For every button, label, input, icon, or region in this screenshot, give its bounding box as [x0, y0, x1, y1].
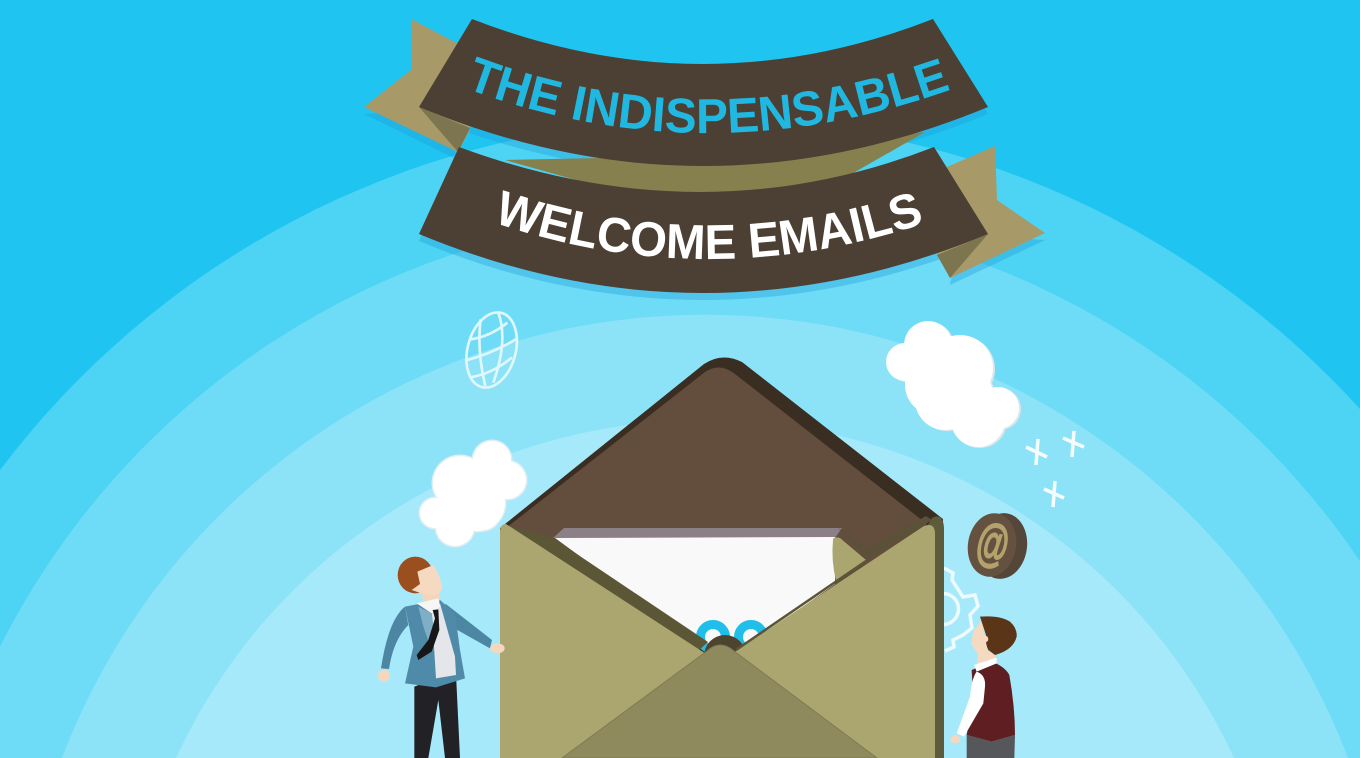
sleeve	[957, 672, 985, 737]
icon: at sign coin	[963, 509, 1031, 582]
icon: globe	[459, 307, 525, 393]
envelope back edge	[500, 357, 944, 758]
ribbon shadows	[364, 26, 1045, 300]
trousers	[414, 674, 460, 758]
envelope	[500, 357, 944, 758]
envelope side strip	[925, 516, 944, 758]
letter curl	[832, 537, 866, 581]
lapel	[418, 607, 434, 641]
ear	[982, 636, 988, 642]
hair	[980, 616, 1017, 655]
right arm	[445, 603, 492, 648]
ribbon connecting band	[505, 132, 925, 215]
ribbon left tail	[364, 19, 470, 152]
heading line one: THE INDISPENSABLE	[474, 56, 950, 134]
left arm	[381, 607, 408, 669]
icon: at sign coin: @	[972, 512, 1013, 575]
envelope bottom flap	[562, 645, 877, 758]
icon: left cloud	[418, 440, 528, 548]
envelope right fold line	[736, 561, 866, 650]
neck	[977, 652, 996, 665]
letter sheet	[555, 537, 835, 648]
face	[971, 620, 988, 655]
envelope seal arc	[704, 635, 746, 677]
jacket	[405, 600, 465, 687]
title ribbon	[364, 19, 1045, 300]
ribbon right tail	[935, 146, 1045, 278]
neck	[422, 590, 440, 605]
figure: man in maroon vest	[950, 616, 1017, 758]
hair	[398, 557, 433, 593]
banner: the indispensable	[419, 19, 988, 166]
envelope dark fold strip	[505, 525, 708, 652]
icon: sparkle crosses	[1026, 431, 1084, 507]
envelope left panel	[500, 524, 716, 758]
figure: man in blue suit	[378, 557, 505, 758]
banner: welcome emails	[419, 147, 988, 293]
vest	[967, 662, 1015, 742]
icon: gear outline	[928, 568, 978, 651]
envelope top flap	[506, 367, 927, 640]
envelope right inner fold	[838, 516, 932, 560]
shirt	[432, 603, 456, 678]
collar	[974, 658, 997, 672]
letter blue rings	[700, 624, 764, 650]
hand	[950, 735, 960, 743]
collar	[417, 598, 440, 613]
letter top shadow	[553, 528, 842, 538]
heading line two: WELCOME EMAILS	[500, 190, 921, 260]
icon: right cloud	[886, 321, 1021, 448]
trousers	[967, 735, 1015, 758]
hands	[378, 643, 505, 682]
envelope right panel	[724, 525, 935, 758]
tie	[417, 609, 439, 660]
face	[412, 565, 442, 596]
